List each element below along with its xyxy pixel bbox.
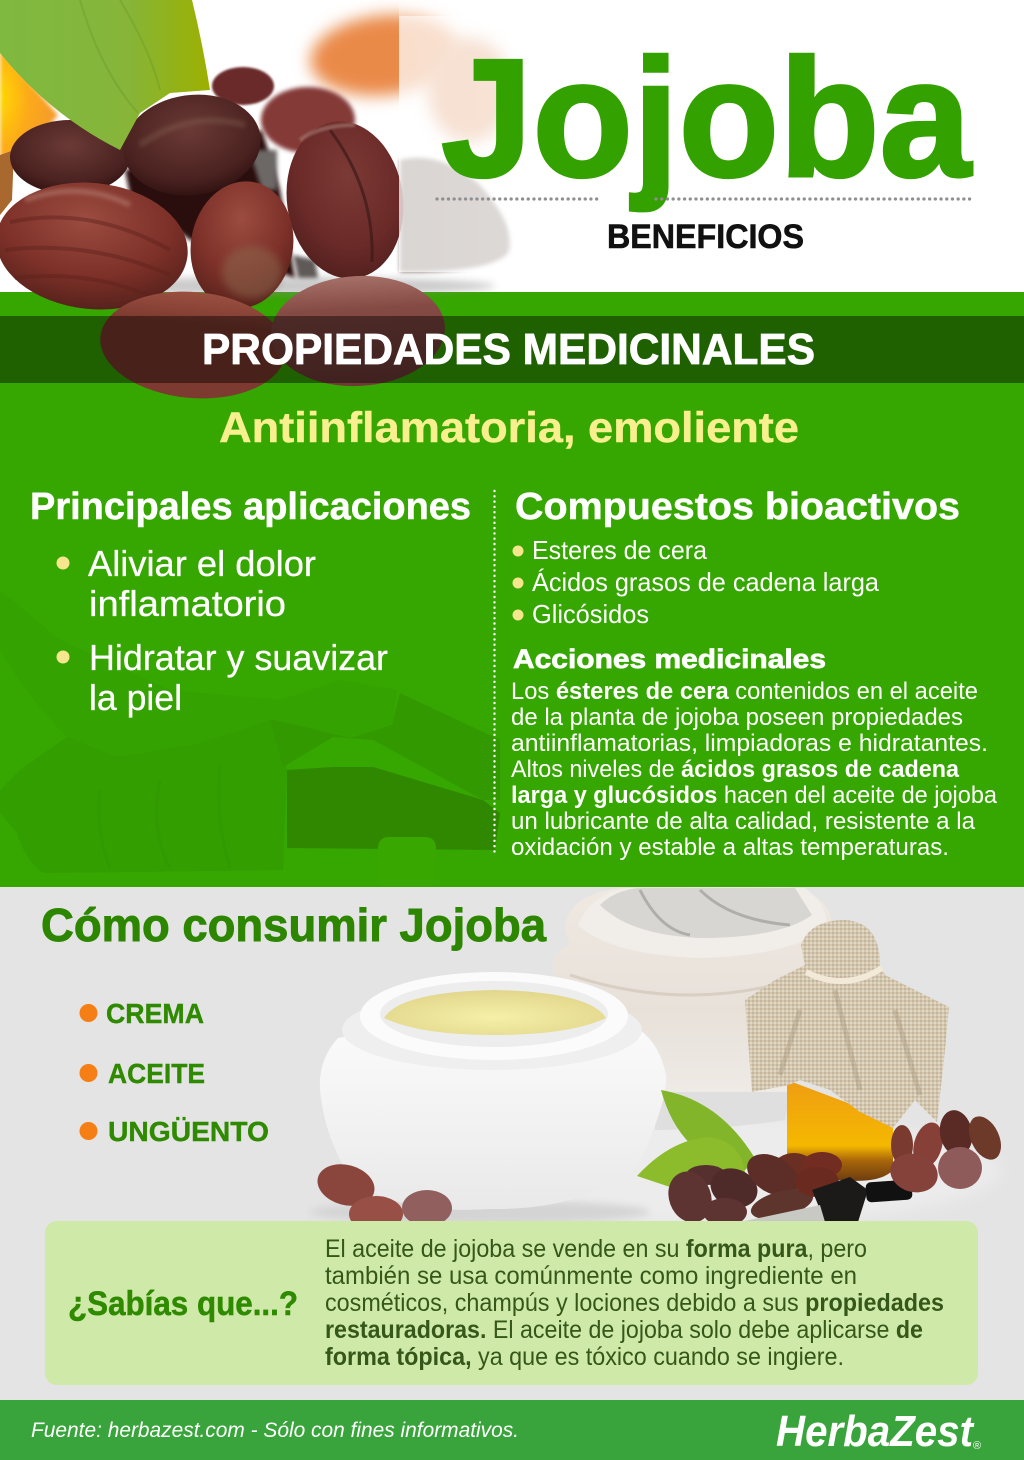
seeds left	[313, 1158, 452, 1232]
blurred orange seed	[306, 7, 464, 103]
heading: Cómo consumir Jojoba: Cómo consumir Jojoba	[41, 899, 546, 951]
back seeds	[10, 120, 130, 194]
panel: acciones medicinales: de la planta de jojoba poseen propiedades	[511, 704, 963, 731]
footer bar: HerbaZest	[776, 1407, 975, 1456]
list: consumption forms: ACEITE	[108, 1058, 205, 1089]
back cream jar	[552, 887, 832, 1130]
column divider	[493, 491, 496, 854]
panel: acciones medicinales: un lubricante de alta calidad, resistente a la	[511, 808, 976, 835]
panel: principales aplicaciones: Aliviar el dolor	[88, 543, 316, 584]
orange fruit	[0, 48, 58, 158]
centre seed	[181, 173, 303, 317]
front seed left	[96, 284, 290, 406]
panel: acciones medicinales: larga y glucósidos hacen del aceite de jojoba	[511, 782, 998, 809]
blurred peach seed under panel	[428, 38, 512, 142]
list: consumption forms: CREMA	[106, 998, 204, 1029]
list: consumption forms: UNGÜENTO	[108, 1116, 269, 1147]
background: grey consumption section	[0, 887, 1024, 1400]
footer bar: Fuente: herbazest.com - Sólo con fines informativos.	[31, 1419, 519, 1442]
callout: sabías que: El aceite de jojoba se vende en su forma pura, pero	[325, 1235, 867, 1263]
panel: compuestos bioactivos: Compuestos bioactivos	[515, 486, 960, 528]
subtitle: Beneficios: BENEFICIOS	[607, 218, 804, 256]
footer bar: ®	[973, 1440, 981, 1452]
list: consumption forms	[80, 998, 269, 1147]
footer bar	[0, 1400, 1024, 1460]
panel: acciones medicinales	[511, 644, 998, 861]
photo: jars, oil bottle and seeds	[310, 887, 1007, 1232]
callout: sabías que: también se usa comúnmente como ingrediente en	[325, 1262, 857, 1290]
panel: compuestos bioactivos: Esteres de cera	[532, 535, 708, 565]
background image: woman silhouette	[0, 590, 500, 887]
green leaf	[0, 0, 210, 150]
subheading: properties: Antiinflamatoria, emoliente	[219, 404, 799, 452]
burlap cloth	[745, 920, 949, 1128]
grey gaps	[249, 150, 277, 190]
pale seed behind title	[400, 158, 511, 272]
panel: acciones medicinales: antiinflamatorias, limpiadoras e hidratantes.	[511, 730, 988, 757]
panel: principales aplicaciones: la piel	[89, 677, 182, 718]
panel: principales aplicaciones: inflamatorio	[89, 583, 286, 624]
callout: sabías que	[45, 1221, 978, 1385]
floor shadow	[310, 1200, 650, 1224]
heading band: Propiedades medicinales	[0, 316, 1024, 383]
panel: compuestos bioactivos	[512, 486, 960, 629]
green leaves	[661, 1090, 756, 1170]
tall right seed	[277, 114, 413, 286]
panel: acciones medicinales: oxidación y estable a altas temperaturas.	[511, 834, 949, 861]
panel: principales aplicaciones	[30, 486, 471, 718]
panel: acciones medicinales: Altos niveles de ácidos grasos de cadena	[511, 756, 960, 783]
callout: sabías que: forma tópica, ya que es tóxico cuando se ingiere.	[325, 1343, 844, 1371]
panel: acciones medicinales: Los ésteres de cera contenidos en el aceite	[511, 678, 978, 705]
callout: sabías que: cosméticos, champús y lociones debido a sus propiedades	[325, 1289, 944, 1317]
title: Jojoba: Jojoba	[441, 24, 973, 212]
panel: principales aplicaciones: Hidratar y suavizar	[89, 637, 388, 678]
heading band: Propiedades medicinales: PROPIEDADES MEDICINALES	[202, 325, 815, 374]
seed shadow	[65, 277, 495, 295]
dotted rule under title	[437, 197, 975, 201]
front white jar	[320, 972, 666, 1210]
callout: sabías que: ¿Sabías que...?	[68, 1285, 298, 1323]
background: green medicinal section	[0, 292, 1024, 887]
background: white header	[0, 0, 1024, 292]
callout: sabías que: restauradoras. El aceite de jojoba solo debe aplicarse de	[325, 1316, 923, 1344]
panel: principales aplicaciones: Principales aplicaciones	[30, 486, 471, 528]
panel: acciones medicinales: Acciones medicinales	[513, 644, 826, 674]
big left seed	[0, 173, 194, 319]
translucent white panel behind title	[399, 0, 1024, 292]
panel: compuestos bioactivos: Glicósidos	[532, 599, 649, 629]
seed cluster	[661, 1145, 913, 1229]
front seed right	[268, 272, 448, 390]
dark gap filler	[125, 130, 295, 278]
seeds right	[886, 1108, 1007, 1198]
floor light	[400, 1115, 1000, 1225]
photo: jojoba seeds and leaf	[0, 0, 512, 406]
oil bottle	[787, 1080, 893, 1181]
panel: compuestos bioactivos: Ácidos grasos de cadena larga	[532, 567, 880, 597]
